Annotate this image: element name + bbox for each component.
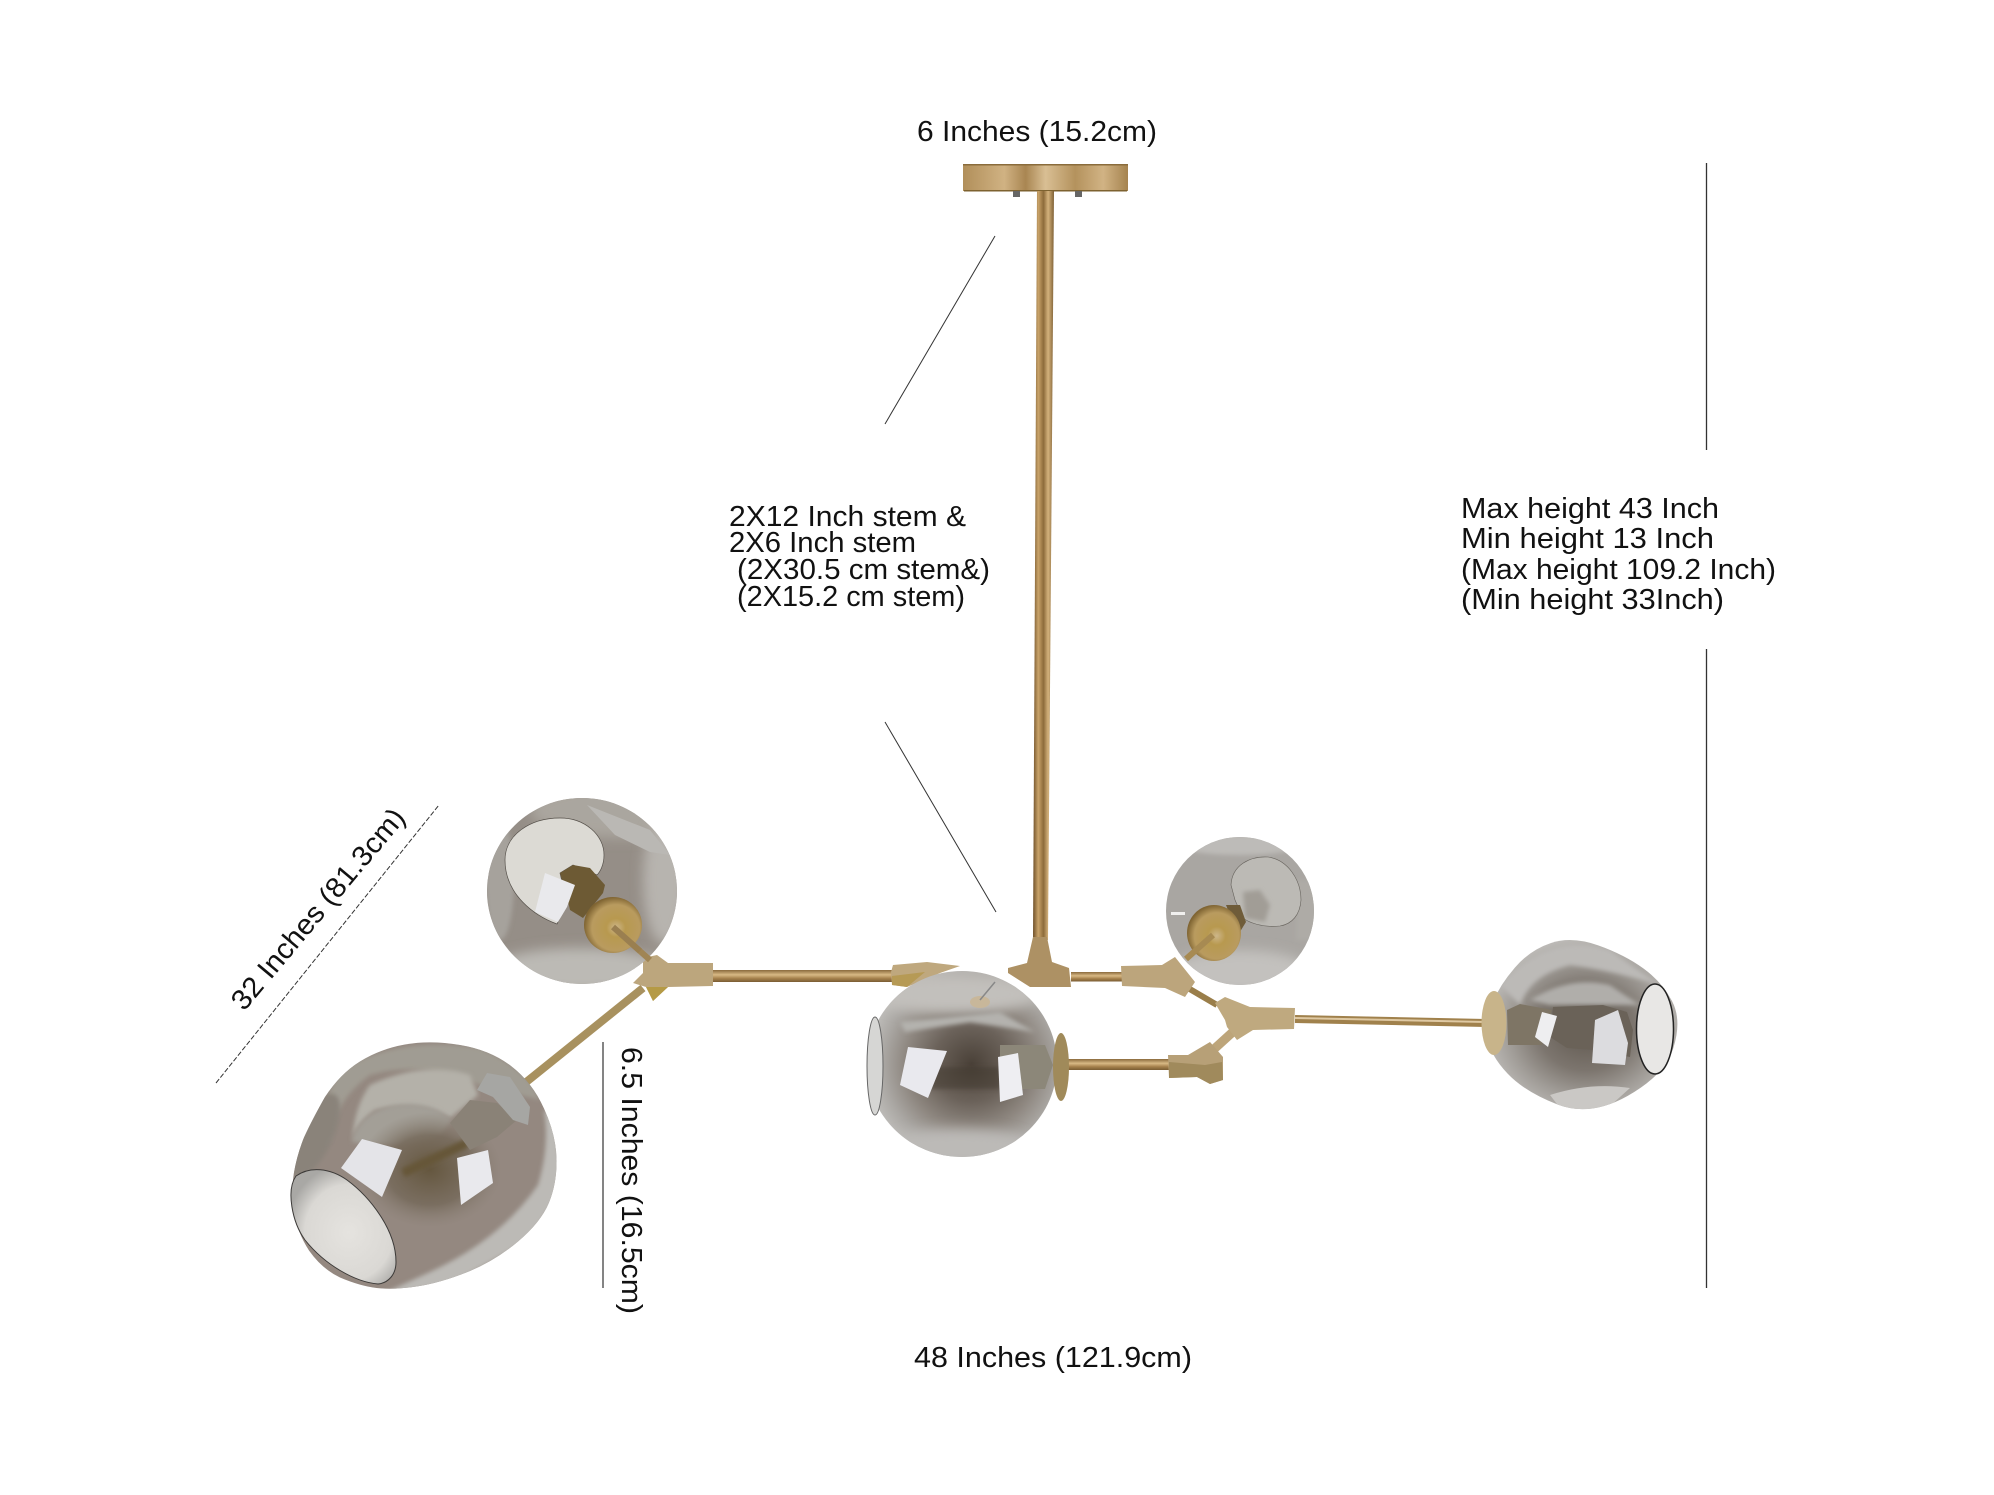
label: total width: 48 Inches (121.9cm) [914,1342,1192,1374]
globe: lower left large [280,1042,562,1295]
globe: upper right [1166,835,1318,994]
globe: far right [1482,940,1677,1115]
vertical stem [1033,191,1054,940]
label: stem lengths: 2X6 Inch stem [729,527,916,559]
leader line: stem top [885,236,995,424]
label: canopy width: 6 Inches (15.2cm) [917,116,1157,148]
label: stem lengths: (2X15.2 cm stem) [737,581,965,613]
label: maximum and minimum height: (Max height 109.2 Inch) [1461,554,1776,586]
label: diagonal span: 32 Inches (81.3cm) [225,802,412,1016]
label: maximum and minimum height [1461,493,1776,616]
chandelier dimension diagram [216,120,1774,1373]
label: maximum and minimum height: Max height 43 Inch [1461,493,1719,525]
label: maximum and minimum height: (Min height 33Inch) [1461,584,1724,616]
ceiling canopy [963,164,1128,197]
label: maximum and minimum height: Min height 13 Inch [1461,523,1714,555]
globe: centre [867,971,1069,1165]
label: stem lengths [729,501,990,613]
globe diameter line [602,1042,604,1288]
height dimension line: lower [1706,649,1708,1288]
label: stem lengths: 2X12 Inch stem & [729,501,966,533]
globe: upper left [487,798,677,984]
height dimension line: upper [1706,163,1708,450]
label: stem lengths: (2X30.5 cm stem&) [737,554,990,586]
leader line: stem bottom [885,722,996,912]
brass arms and hubs [525,937,1486,1084]
label: globe diameter: 6.5 Inches (16.5cm) [615,1047,647,1314]
dashed dimension line: diagonal span [216,805,439,1083]
